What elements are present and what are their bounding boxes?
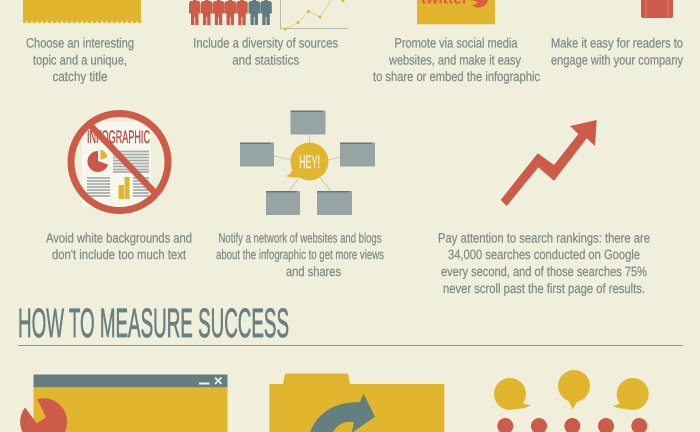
chart: line chart	[280, 0, 348, 30]
icon: crossed-out infographic: INFOGRAPHIC	[87, 127, 150, 147]
icon: folder with arrow	[269, 374, 444, 432]
text: search rankings: every second, and of those searches 75%	[441, 264, 647, 279]
text: choose a title: Choose an interesting	[26, 36, 134, 50]
diagram: HEY network: HEY!	[299, 152, 320, 172]
text: search rankings	[438, 230, 650, 296]
text: notify a network	[216, 230, 384, 279]
text: notify a network: and shares	[286, 264, 341, 279]
text: diversity of sources	[193, 36, 338, 68]
text: engage with your company	[551, 36, 683, 68]
text: promote via social media	[373, 36, 540, 84]
text: promote via social media: websites, and make it easy	[388, 52, 521, 68]
icon: crossed-out infographic	[71, 114, 168, 210]
text: search rankings: never scroll past the first page of results.	[443, 281, 645, 296]
text: diversity of sources: and statistics	[232, 52, 299, 68]
text: choose a title: topic and a unique,	[33, 52, 127, 68]
text: notify a network: Notify a network of websites and blogs	[218, 230, 382, 246]
text: notify a network: about the infographic to get more views	[216, 247, 384, 262]
icon: red person torso	[641, 0, 673, 18]
text: avoid white backgrounds: Avoid white backgrounds and	[46, 230, 192, 246]
text: search rankings: 34,000 searches conducted on Google	[448, 247, 640, 262]
diagram: HEY network	[240, 110, 375, 215]
icon: rising arrow	[501, 120, 597, 206]
icon: yellow title banner	[23, 0, 141, 22]
text: avoid white backgrounds	[46, 230, 192, 262]
text: avoid white backgrounds: don't include too much text	[52, 247, 186, 262]
text: diversity of sources: Include a diversity of sources	[193, 36, 338, 50]
icon: browser window with pie	[20, 374, 228, 432]
text: promote via social media: Promote via social media	[394, 36, 518, 50]
icon: row of people	[189, 0, 272, 25]
text: choose a title: catchy title	[52, 69, 108, 84]
text: HOW TO MEASURE SUCCESS	[18, 300, 289, 346]
text: choose a title	[26, 36, 134, 84]
text: promote via social media: to share or embed the infographic	[373, 69, 540, 84]
icon: twitter card	[417, 0, 495, 24]
icon: speech bubbles and dots	[494, 370, 649, 432]
text: search rankings: Pay attention to search rankings: there are	[438, 230, 650, 246]
